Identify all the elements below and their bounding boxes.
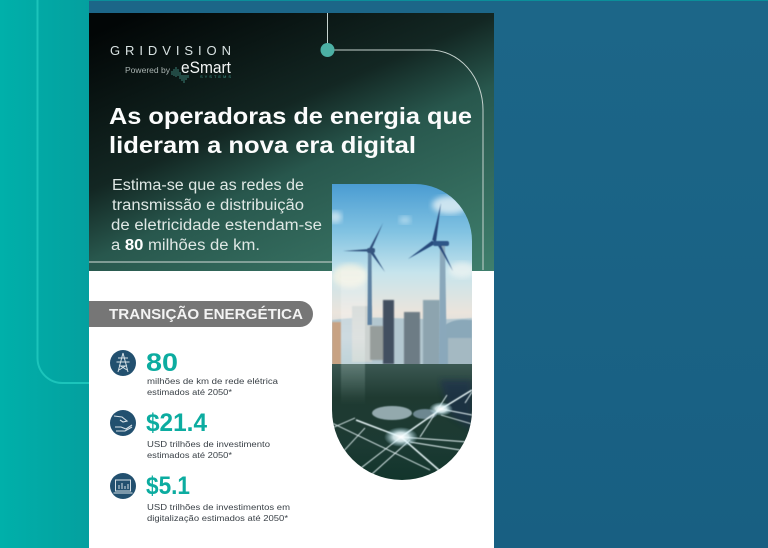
stat: 80 million km <box>110 349 279 397</box>
icon: laptop with chart <box>110 473 136 499</box>
white card <box>89 270 494 548</box>
title: lideram a nova era digital <box>109 132 416 158</box>
distant hills <box>332 318 472 366</box>
section heading pill: TRANSIÇÃO ENERGÉTICA <box>109 305 303 323</box>
stat: 80 million km: estimados até 2050* <box>147 388 232 397</box>
icon: sound wave mark <box>172 67 188 83</box>
photo: wind turbines and city in rounded shape <box>328 184 476 484</box>
stat: 21.4 trillion <box>110 409 271 460</box>
icon: transmission tower <box>110 350 136 376</box>
subtitle text: transmissão e distribuição <box>112 197 304 214</box>
subtitle text: Estima-se que as redes de <box>112 177 304 194</box>
title: As operadoras de energia que <box>109 103 472 129</box>
stat: 5.1 trillion: USD trilhões de investimentos em <box>147 503 290 512</box>
section heading pill <box>89 301 313 327</box>
glowing grid lines <box>332 390 472 474</box>
translucent light band <box>340 290 366 396</box>
stat: 5.1 trillion: digitalização estimados até 2050* <box>147 514 288 523</box>
title <box>109 103 472 158</box>
logo: GridVision powered by eSmart: GRIDVISION <box>110 43 231 58</box>
stat: 21.4 trillion: estimados até 2050* <box>147 451 232 460</box>
logo: GridVision powered by eSmart: Powered by <box>125 66 170 75</box>
subtitle text: de eletricidade estendam-se <box>111 217 322 234</box>
background: left teal panel <box>0 0 89 548</box>
subtitle text: a 80 milhões de km. <box>111 237 260 254</box>
turbine right <box>408 203 453 368</box>
sky <box>332 184 472 322</box>
background outline line <box>38 0 89 383</box>
stat: 80 million km: 80 <box>146 349 178 377</box>
stat: 80 million km: milhões de km de rede elétrica <box>147 377 279 386</box>
subtitle text <box>111 177 322 254</box>
logo: GridVision powered by eSmart: eSmart <box>181 59 231 77</box>
ground <box>332 364 472 484</box>
header divider line <box>89 261 340 263</box>
connector line with node <box>320 13 483 270</box>
logo: GridVision powered by eSmart: SYSTEMS <box>200 74 231 79</box>
stat: 21.4 trillion: $21.4 <box>146 409 207 437</box>
buildings <box>332 300 472 368</box>
stat: 5.1 trillion: $5.1 <box>146 472 190 500</box>
dark header panel <box>89 13 494 271</box>
turbine left <box>343 223 385 325</box>
stat: 21.4 trillion: USD trilhões de investimento <box>147 440 271 449</box>
icon: hand with coin <box>110 410 136 436</box>
stat: 5.1 trillion <box>110 472 290 523</box>
logo: GridVision powered by eSmart <box>110 43 231 83</box>
